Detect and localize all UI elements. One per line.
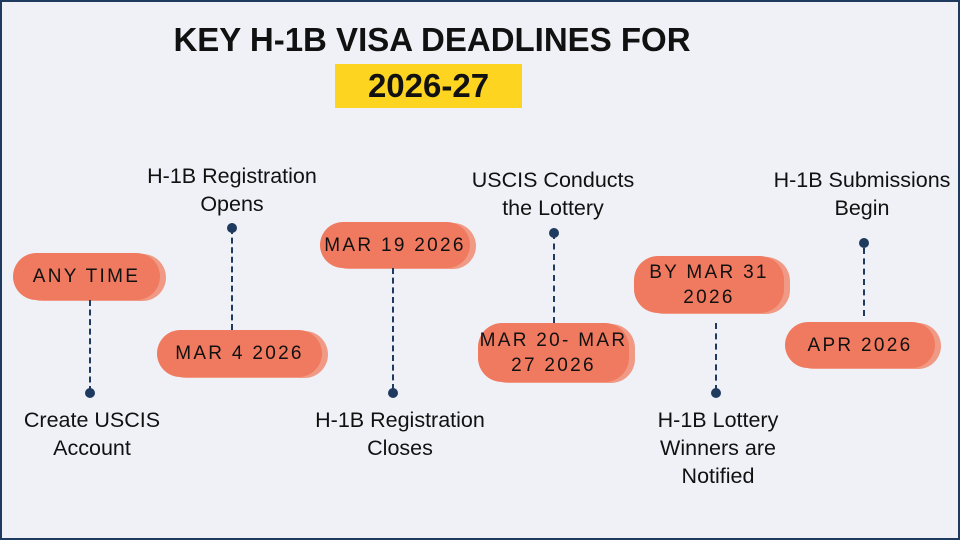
label: registration opens: Opens — [200, 192, 264, 216]
pill: mar 20-27 — [478, 323, 629, 382]
pill: mar 19: MAR 19 2026 — [324, 234, 466, 256]
title year highlight — [335, 64, 522, 108]
label: lottery: the Lottery — [502, 196, 604, 220]
title year highlight: 2026-27 — [368, 67, 489, 104]
pill: mar 4: MAR 4 2026 — [175, 343, 304, 364]
pill: by mar 31 — [634, 256, 784, 313]
label: registration opens: H-1B Registration — [147, 164, 317, 188]
label: registration closes — [315, 408, 485, 460]
label: lottery: USCIS Conducts — [472, 168, 634, 192]
pill: any time — [13, 253, 160, 300]
pill: by mar 31: BY MAR 31 — [649, 262, 769, 282]
label: winners notified: Notified — [682, 464, 754, 488]
label: submissions begin: Begin — [834, 196, 890, 220]
label: registration closes: Closes — [367, 436, 433, 460]
label: winners notified: Winners are — [660, 436, 776, 460]
pill: mar 20-27: MAR 20- MAR — [480, 330, 627, 350]
pill: mar 20-27: 27 2026 — [511, 354, 596, 376]
label: create account: Create USCIS — [24, 408, 160, 432]
pill: mar 4 — [157, 330, 322, 377]
pill: mar 19 — [320, 222, 470, 268]
pill: by mar 31: 2026 — [683, 286, 735, 308]
label: submissions begin — [774, 168, 950, 220]
label: create account — [24, 408, 160, 460]
pill: any time: ANY TIME — [33, 266, 140, 287]
pill: apr 2026 — [785, 322, 935, 368]
label: winners notified: H-1B Lottery — [658, 408, 778, 432]
title: KEY H-1B VISA DEADLINES FOR — [173, 21, 691, 58]
label: registration closes: H-1B Registration — [315, 408, 485, 432]
label: submissions begin: H-1B Submissions — [774, 168, 950, 192]
label: winners notified — [658, 408, 778, 488]
label: create account: Account — [53, 436, 131, 460]
label: lottery — [472, 168, 634, 220]
pill: apr 2026: APR 2026 — [807, 334, 912, 356]
label: registration opens — [147, 164, 317, 216]
